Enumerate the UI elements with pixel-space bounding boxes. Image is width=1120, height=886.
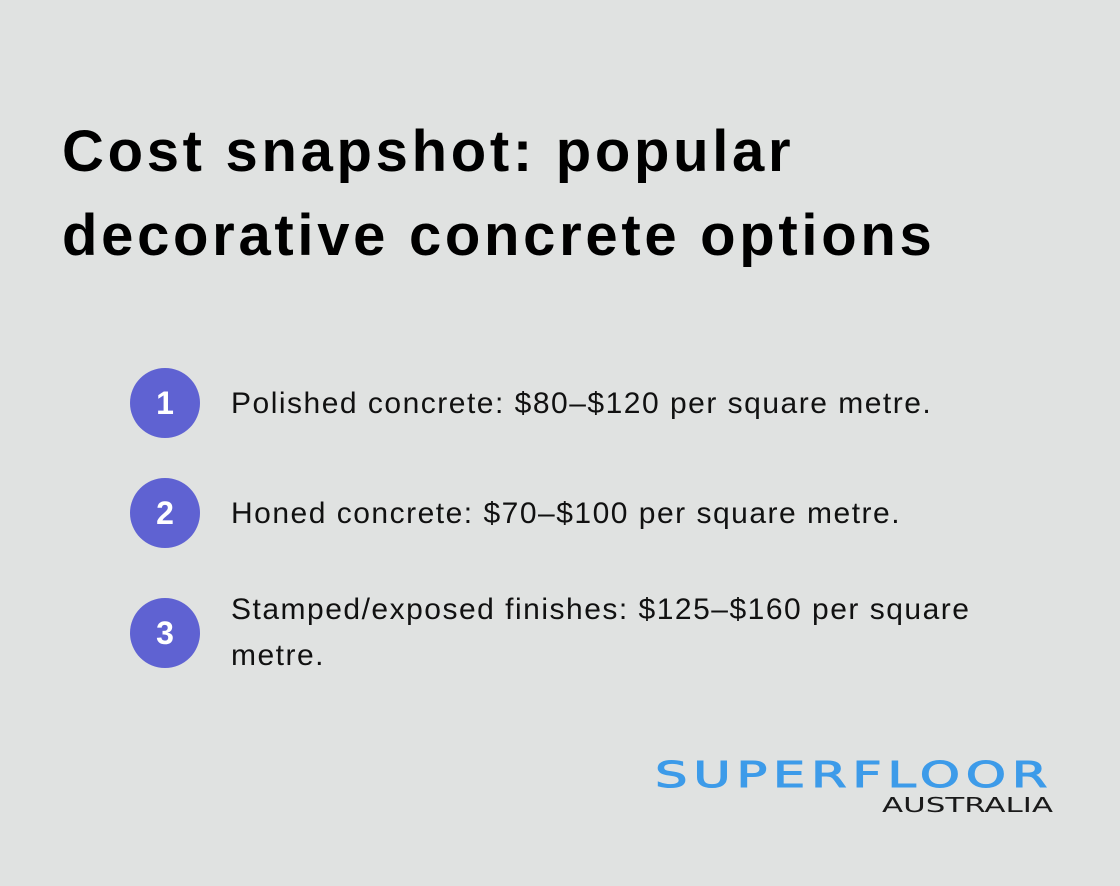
icon: number 1: 1 bbox=[156, 385, 174, 421]
icon: number 2: 2 bbox=[156, 495, 174, 531]
item 2 bbox=[130, 478, 901, 548]
logo bbox=[655, 755, 1053, 817]
icon: number 3 bbox=[130, 598, 200, 668]
title: Cost snapshot: popular bbox=[62, 119, 794, 184]
title: decorative concrete options bbox=[62, 203, 935, 268]
title bbox=[62, 119, 935, 268]
text: polished: Polished concrete: $80–$120 per square metre. bbox=[231, 387, 932, 420]
item 1 bbox=[130, 368, 932, 438]
logo: SUPERFLOOR bbox=[655, 755, 1053, 796]
text: honed: Honed concrete: $70–$100 per square metre. bbox=[231, 497, 901, 530]
icon: number 3: 3 bbox=[156, 615, 174, 651]
icon: number 2 bbox=[130, 478, 200, 548]
icon: number 1 bbox=[130, 368, 200, 438]
text: stamped: Stamped/exposed finishes: $125–$160 per square metre. bbox=[231, 593, 970, 672]
logo: AUSTRALIA bbox=[882, 793, 1053, 817]
item 3 bbox=[130, 593, 970, 672]
